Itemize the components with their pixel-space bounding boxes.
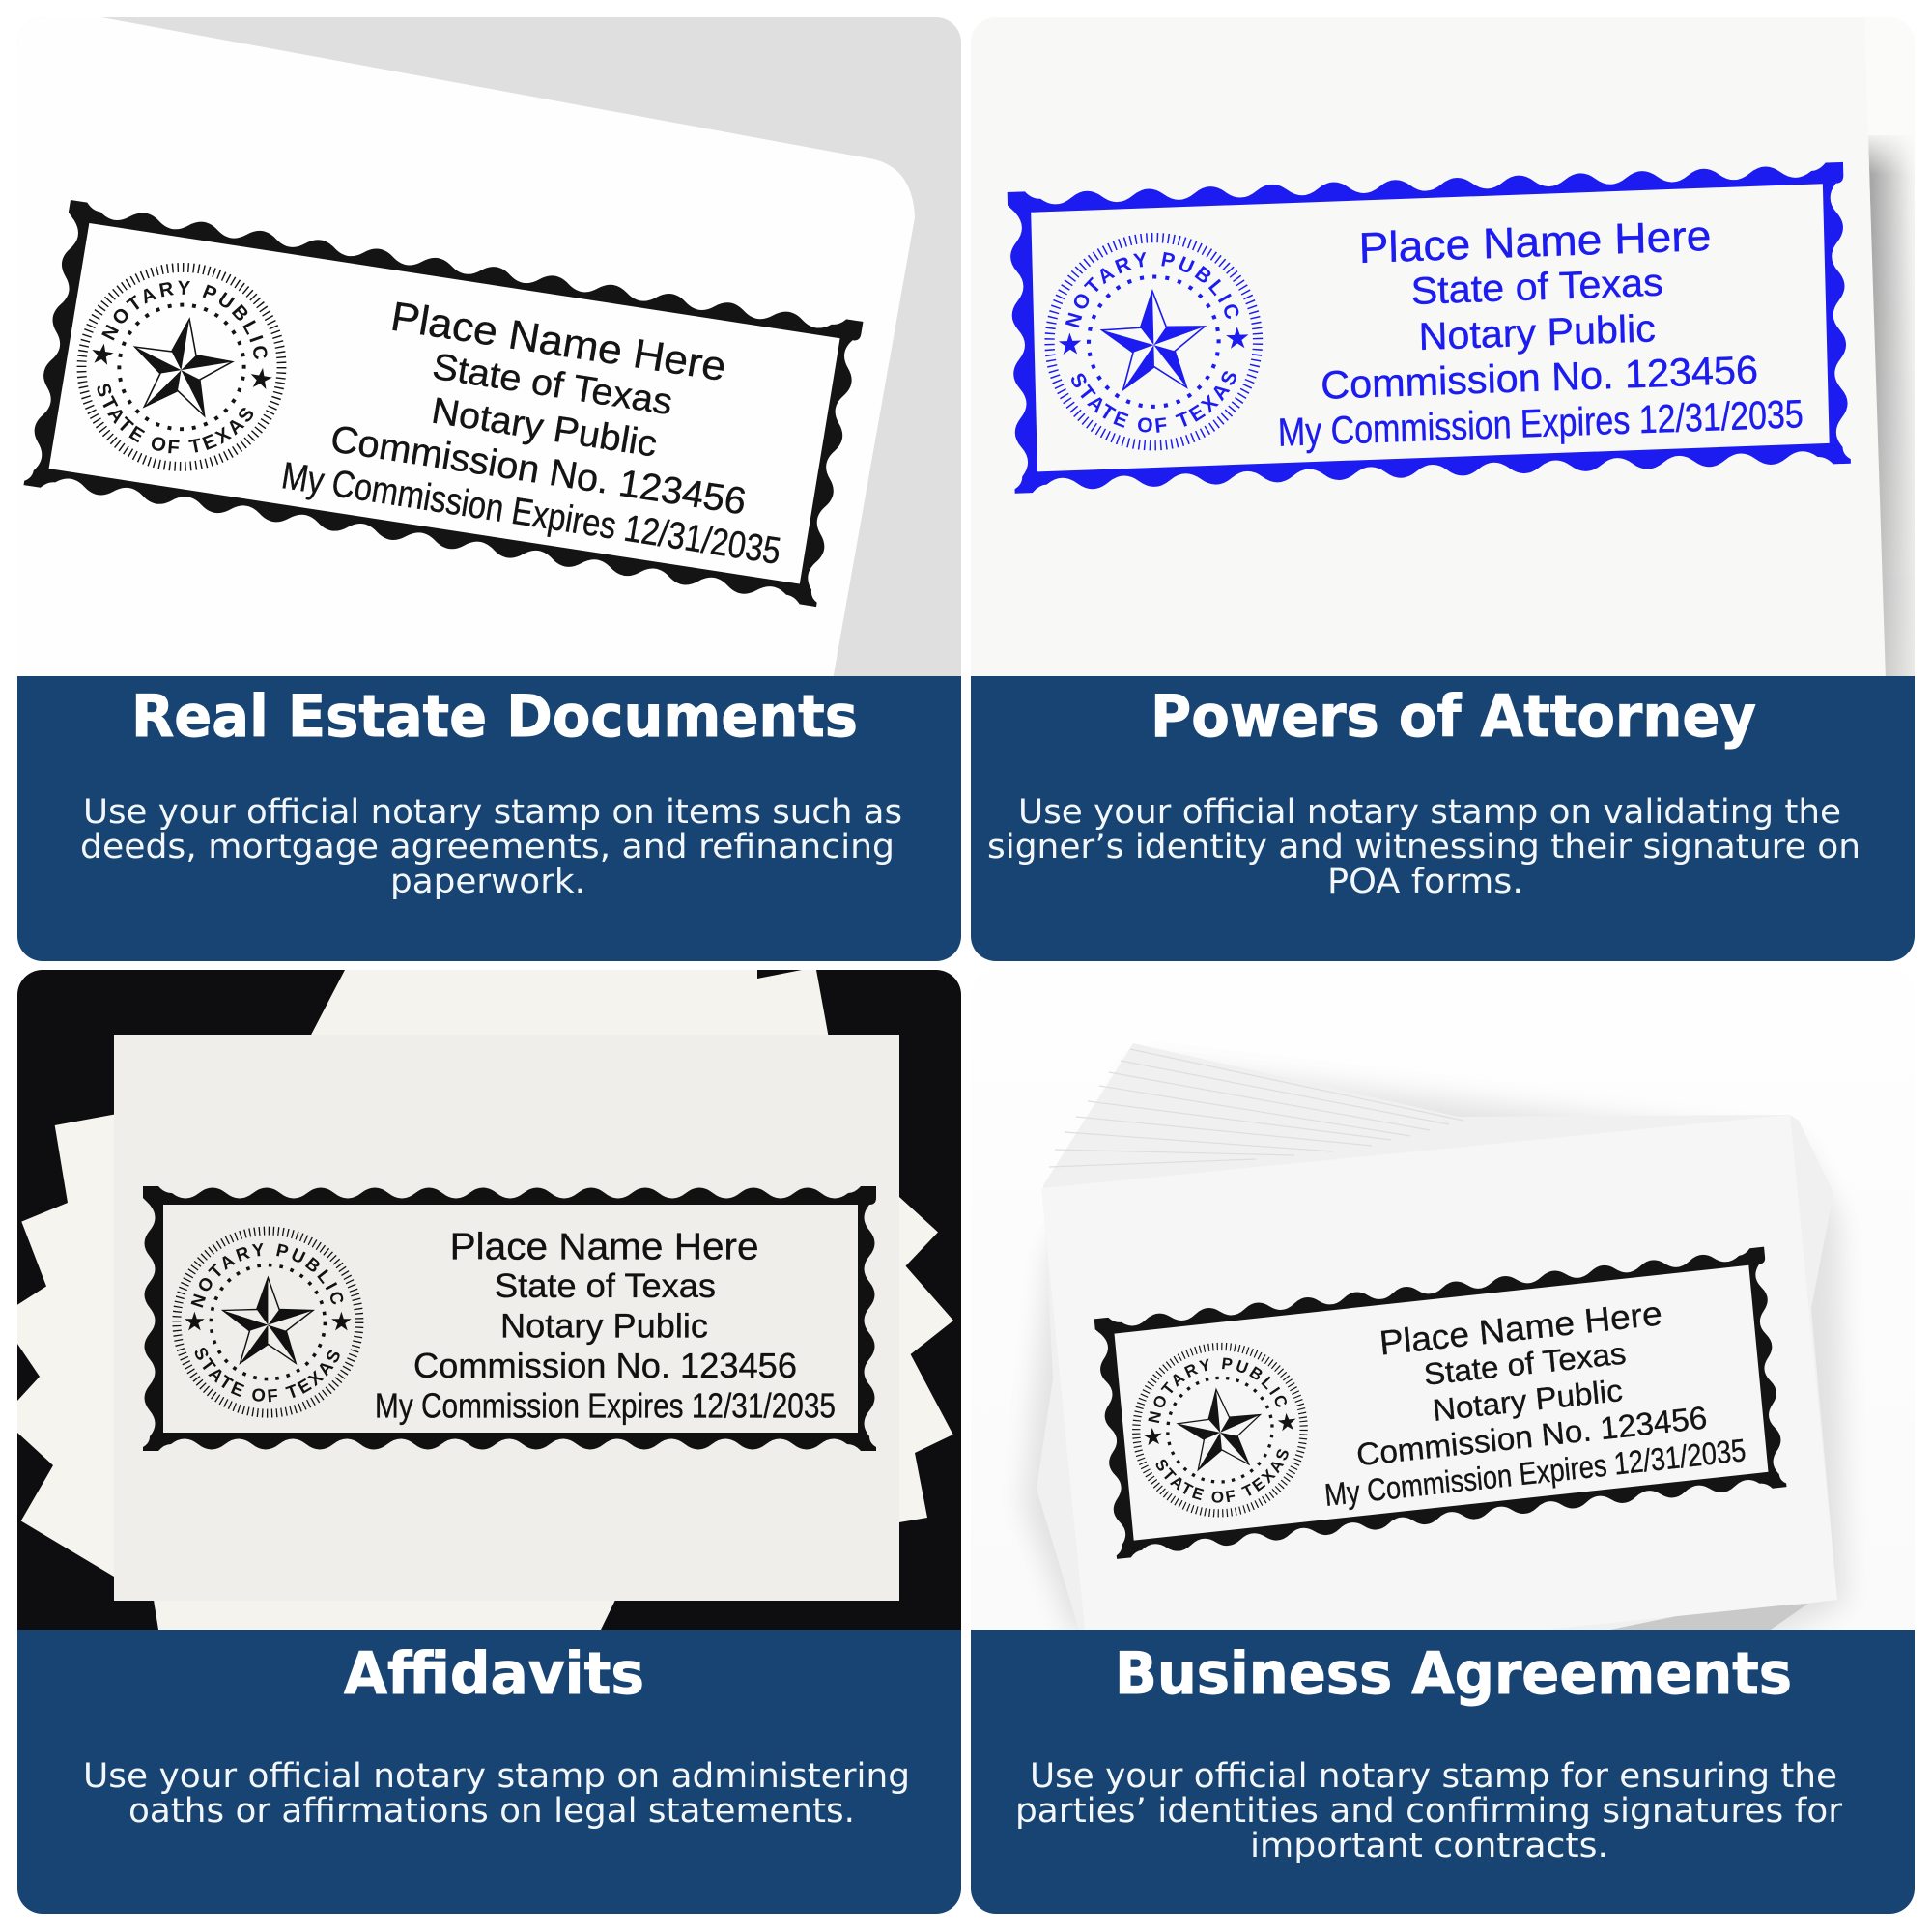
black notary stamp: State of Texas xyxy=(495,1267,716,1305)
black notary stamp: Commission No. 123456 xyxy=(413,1346,797,1385)
black notary stamp: Notary Public xyxy=(500,1308,708,1346)
black notary stamp: Commission No. 123456 xyxy=(1355,1400,1709,1472)
blue notary stamp: Commission No. 123456 xyxy=(1321,348,1758,408)
black notary stamp: State of Texas xyxy=(430,346,675,423)
description xyxy=(989,798,1858,893)
black notary stamp: Place Name Here xyxy=(1378,1293,1663,1363)
black notary stamp: State of Texas xyxy=(1422,1336,1628,1392)
black notary stamp: STATE OF TEXAS xyxy=(195,1348,340,1403)
heading: Affidavits xyxy=(344,1640,644,1708)
black notary stamp: Notary Public xyxy=(429,390,660,466)
description: oaths or affirmations on legal statements. xyxy=(128,1792,855,1831)
black notary stamp xyxy=(143,1186,876,1451)
description: important contracts. xyxy=(1250,1827,1608,1865)
black notary stamp: NOTARY PUBLIC xyxy=(191,1243,344,1308)
description: Use your official notary stamp for ensuring the xyxy=(1030,1757,1837,1796)
heading: Real Estate Documents xyxy=(131,683,858,751)
black notary stamp: STATE OF TEXAS xyxy=(97,384,253,454)
blue notary stamp xyxy=(1007,162,1851,494)
description xyxy=(1015,1757,1843,1865)
black notary stamp: NOTARY PUBLIC xyxy=(101,280,267,359)
description: deeds, mortgage agreements, and refinancing xyxy=(80,828,895,867)
black notary stamp: Commission No. 123456 xyxy=(327,417,749,523)
caption block xyxy=(971,676,1915,961)
description: parties’ identities and confirming signatures for xyxy=(1015,1792,1843,1831)
panel: real estate documents xyxy=(17,17,961,961)
description xyxy=(80,793,902,901)
description: Use your official notary stamp on administering xyxy=(83,1757,910,1796)
caption block xyxy=(17,1630,961,1914)
photo: fanned white cards on black xyxy=(17,970,961,1636)
blue notary stamp: STATE OF TEXAS xyxy=(1071,371,1236,433)
description: signer’s identity and witnessing their signature on xyxy=(987,828,1861,867)
black notary stamp xyxy=(1094,1246,1787,1559)
panel: powers of attorney xyxy=(971,17,1915,961)
heading: Powers of Attorney xyxy=(1151,683,1756,751)
black notary stamp: STATE OF TEXAS xyxy=(1155,1449,1289,1503)
panel: business agreements xyxy=(971,1043,1915,1914)
photo: paper on grey background xyxy=(17,17,961,684)
black notary stamp: NOTARY PUBLIC xyxy=(1148,1358,1287,1424)
photo: textured paper with drop shadow xyxy=(971,17,1917,684)
black notary stamp: My Commission Expires 12/31/2035 xyxy=(279,454,783,573)
black notary stamp: My Commission Expires 12/31/2035 xyxy=(375,1385,836,1426)
blue notary stamp: My Commission Expires 12/31/2035 xyxy=(1277,391,1804,455)
black notary stamp xyxy=(23,200,864,607)
black notary stamp: My Commission Expires 12/31/2035 xyxy=(1323,1432,1747,1513)
description: Use your official notary stamp on items such as xyxy=(83,793,902,832)
blue notary stamp: Notary Public xyxy=(1418,307,1656,358)
blue notary stamp: Place Name Here xyxy=(1358,213,1712,272)
black notary stamp: Place Name Here xyxy=(450,1227,759,1268)
description: Use your official notary stamp on validating the xyxy=(1018,793,1841,832)
blue notary stamp: State of Texas xyxy=(1410,262,1663,313)
description: paperwork. xyxy=(390,863,585,901)
blue notary stamp: NOTARY PUBLIC xyxy=(1065,251,1238,328)
description: POA forms. xyxy=(1327,863,1523,901)
photo: stack of white cards xyxy=(1012,1043,1859,1630)
caption block xyxy=(971,1630,1915,1914)
heading: Business Agreements xyxy=(1115,1640,1792,1708)
black notary stamp: Place Name Here xyxy=(387,294,729,390)
panel: affidavits xyxy=(17,970,961,1914)
description xyxy=(83,1757,910,1831)
black notary stamp: Notary Public xyxy=(1431,1373,1624,1428)
caption block xyxy=(17,676,961,961)
